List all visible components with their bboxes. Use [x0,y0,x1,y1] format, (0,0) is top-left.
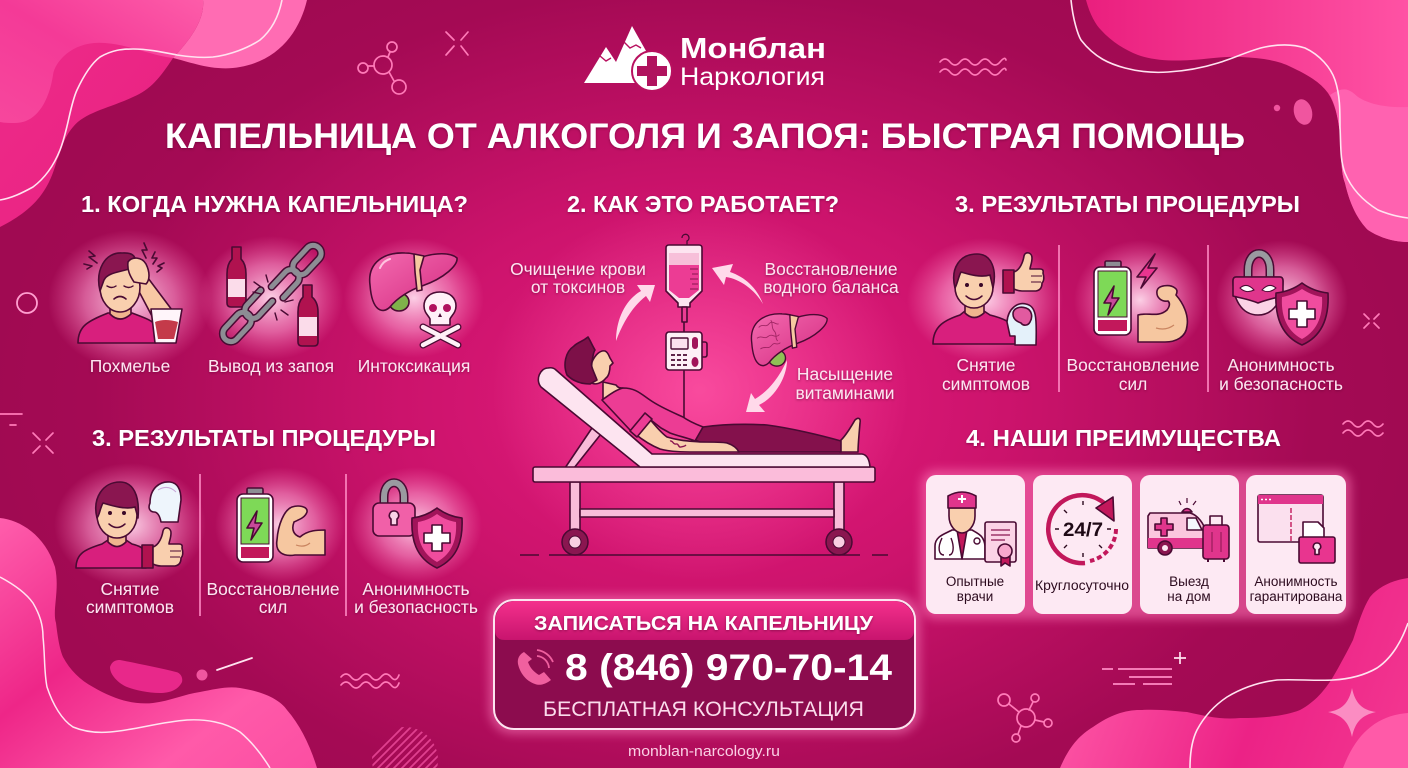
call to action box [489,595,920,734]
icon: chain and bottles [199,236,343,360]
label: Анонимность [362,579,470,599]
icon: mask lock and shield [1216,240,1348,360]
label: Снятие [957,355,1015,375]
CTA heading: ЗАПИСАТЬСЯ НА КАПЕЛЬНИЦУ [534,613,874,635]
label: сил [1119,374,1147,394]
label: Похмелье [90,356,170,376]
icon: drip bag [666,234,702,322]
patient [565,337,860,452]
card text: на дом [1167,589,1211,604]
icon: battery and arm [215,467,345,583]
card: experienced doctors [926,475,1025,614]
clock text: 24/7 [1063,520,1103,541]
label: и безопасность [1219,374,1343,394]
icon: liver with skull [344,238,484,358]
heading: 2. КАК ЭТО РАБОТАЕТ? [567,191,839,217]
label: Интоксикация [358,356,470,376]
brand name: Монблан [680,33,826,65]
label: симптомов [86,597,174,617]
label: Насыщение [797,364,893,384]
heading: 3. РЕЗУЛЬТАТЫ ПРОЦЕДУРЫ [92,425,436,451]
label: Очищение крови [510,259,646,279]
brand subtitle: Наркология [680,63,825,91]
icon: man, head and thumb up [54,463,206,587]
title: КАПЕЛЬНИЦА ОТ АЛКОГОЛЯ И ЗАПОЯ: БЫСТРАЯ ПОМОЩЬ [165,117,1245,156]
icon: mountains with medical cross [584,26,672,91]
icon: phone [518,650,553,685]
heading: 4. НАШИ ПРЕИМУЩЕСТВА [966,425,1281,451]
panel: when a drip is needed [48,191,484,376]
illustration: patient on the bed [520,337,888,555]
logo [584,26,826,91]
panel: how it works [490,191,910,580]
bed frame [520,368,888,555]
panel: procedure results (right) [907,191,1348,394]
CTA note: БЕСПЛАТНАЯ КОНСУЛЬТАЦИЯ [543,698,864,721]
label: от токсинов [531,277,625,297]
card text: Выезд [1169,574,1209,589]
label: и безопасность [354,597,478,617]
heading: 3. РЕЗУЛЬТАТЫ ПРОЦЕДУРЫ [955,191,1300,217]
icon: infusion pump and tube [666,322,707,433]
label: симптомов [942,374,1030,394]
icon: liver [751,314,827,366]
panel: our advantages [921,425,1351,619]
label: сил [259,597,287,617]
label: Снятие [101,579,159,599]
card text: Опытные [946,574,1004,589]
icon: battery, bolt and arm [1074,240,1206,360]
arrow: to the drip, left [616,285,655,341]
card text: гарантирована [1250,589,1343,604]
card: guaranteed anonymity [1246,475,1346,614]
label: Восстановление [1066,355,1200,375]
icon: man, thumb up and brain [907,238,1063,362]
phone number: 8 (846) 970-70-14 [565,647,892,688]
card: round the clock [1033,475,1132,614]
label: Вывод из запоя [208,356,334,376]
heading: 1. КОГДА НУЖНА КАПЕЛЬНИЦА? [81,191,468,217]
label: Анонимность [1227,355,1335,375]
arrow: to the drip, right [712,264,763,304]
icon: hangover [48,230,212,370]
panel: procedure results (left) [54,425,482,617]
label: водного баланса [763,277,899,297]
icon: lock and shield [350,467,482,583]
label: Восстановление [764,259,898,279]
label: витаминами [795,383,895,403]
card text: врачи [957,589,993,604]
website: monblan-narcology.ru [628,744,780,760]
card text: Анонимность [1254,574,1338,589]
card text: Круглосуточно [1035,578,1129,593]
label: Восстановление [206,579,340,599]
card: home visit [1140,475,1239,614]
arrow: to the patient [746,360,787,412]
